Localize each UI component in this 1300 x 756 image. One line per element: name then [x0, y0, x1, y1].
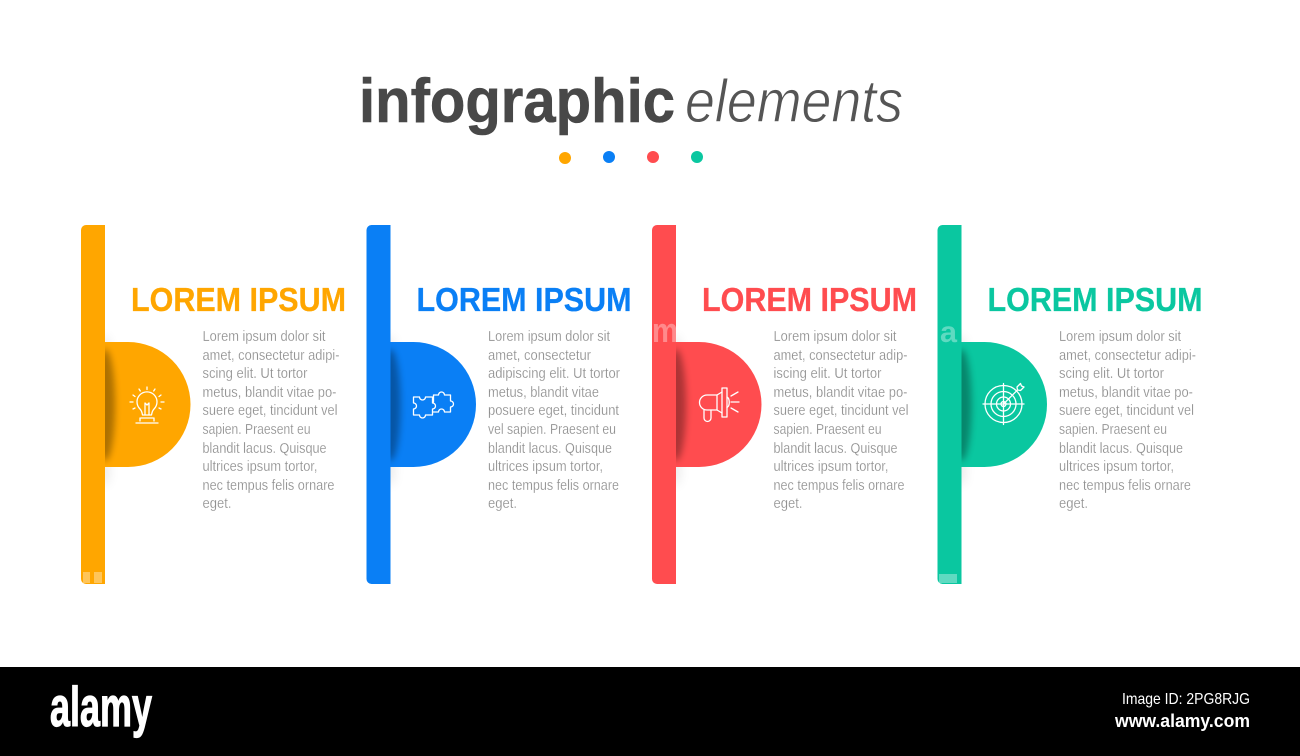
heading: LOREM IPSUM [131, 281, 346, 318]
bar [652, 225, 676, 584]
body text: sapien. Praesent eu [1059, 422, 1167, 438]
body text: amet, consectetur adipi- [202, 348, 340, 364]
body text: eget. [488, 496, 517, 512]
body text: ultrices ipsum tortor, [488, 459, 603, 475]
body text: eget. [202, 496, 232, 512]
body text: suere eget, tincidunt vel [1059, 403, 1194, 419]
body text: ultrices ipsum tortor, [774, 459, 888, 475]
icon: target with arrow [983, 384, 1024, 424]
watermark fragments: a [940, 316, 957, 349]
body text: blandit lacus. Quisque [1059, 441, 1183, 457]
panel: step 1 orange [81, 225, 346, 584]
body text: nec tempus felis ornare [202, 478, 334, 494]
body text: adipiscing elit. Ut tortor [488, 366, 620, 382]
body text [488, 329, 620, 512]
body text: scing elit. Ut tortor [202, 366, 308, 382]
panel: step 4 green [938, 225, 1202, 584]
footer bar [0, 667, 1300, 756]
body text: amet, consectetur [488, 348, 591, 364]
body text: nec tempus felis ornare [488, 478, 619, 494]
body text: iscing elit. Ut tortor [774, 366, 882, 382]
heading: LOREM IPSUM [702, 281, 917, 318]
body text: blandit lacus. Quisque [488, 441, 612, 457]
body text: sapien. Praesent eu [202, 422, 310, 438]
panel: step 3 red [652, 225, 917, 584]
panel: step 2 blue [366, 225, 632, 584]
heading: LOREM IPSUM [416, 281, 632, 318]
body text [1059, 329, 1196, 512]
body text: ultrices ipsum tortor, [1059, 459, 1174, 475]
body text: blandit lacus. Quisque [202, 441, 326, 457]
website: www.alamy.com [1114, 711, 1250, 731]
body text: vel sapien. Praesent eu [488, 422, 616, 438]
icon: light bulb [130, 387, 164, 423]
image id: Image ID: 2PG8RJG [1122, 691, 1250, 708]
icon: megaphone [700, 388, 739, 422]
body text: suere eget, tincidunt vel [774, 403, 908, 419]
body text: metus, blandit vitae [488, 385, 599, 401]
body text [774, 329, 908, 512]
body text: nec tempus felis ornare [774, 478, 904, 494]
half disc [676, 342, 762, 467]
body text: amet, consectetur adipi- [1059, 348, 1196, 364]
body text: sapien. Praesent eu [774, 422, 882, 438]
body text: scing elit. Ut tortor [1059, 366, 1164, 382]
title: elements [685, 68, 903, 135]
heading: LOREM IPSUM [988, 281, 1202, 318]
body text: metus, blandit vitae po- [774, 385, 908, 401]
body text: Lorem ipsum dolor sit [1059, 329, 1181, 345]
body text: metus, blandit vitae po- [1059, 385, 1193, 401]
body text: ultrices ipsum tortor, [202, 459, 318, 475]
body text: Lorem ipsum dolor sit [202, 329, 326, 345]
alamy logo: alamy [50, 675, 152, 738]
half disc [962, 342, 1047, 467]
watermark fragments [83, 312, 957, 583]
body text: eget. [1059, 496, 1088, 512]
watermark fragments: m [652, 312, 678, 350]
title [359, 67, 903, 136]
colour dots [559, 151, 703, 164]
body text: Lorem ipsum dolor sit [488, 329, 610, 345]
body text: eget. [774, 496, 802, 512]
body text: suere eget, tincidunt vel [202, 403, 338, 419]
bar [938, 225, 962, 584]
title: infographic [359, 67, 675, 136]
body text: posuere eget, tincidunt [488, 403, 619, 419]
icon: puzzle pieces [414, 392, 454, 418]
body text: metus, blandit vitae po- [202, 385, 337, 401]
bar [81, 225, 105, 584]
body text: blandit lacus. Quisque [774, 441, 898, 457]
body text: nec tempus felis ornare [1059, 478, 1191, 494]
body text: amet, consectetur adip- [774, 348, 908, 364]
half disc [390, 342, 476, 467]
body text: Lorem ipsum dolor sit [774, 329, 896, 345]
body text [202, 329, 340, 512]
bar [366, 225, 390, 584]
half disc [105, 342, 190, 467]
